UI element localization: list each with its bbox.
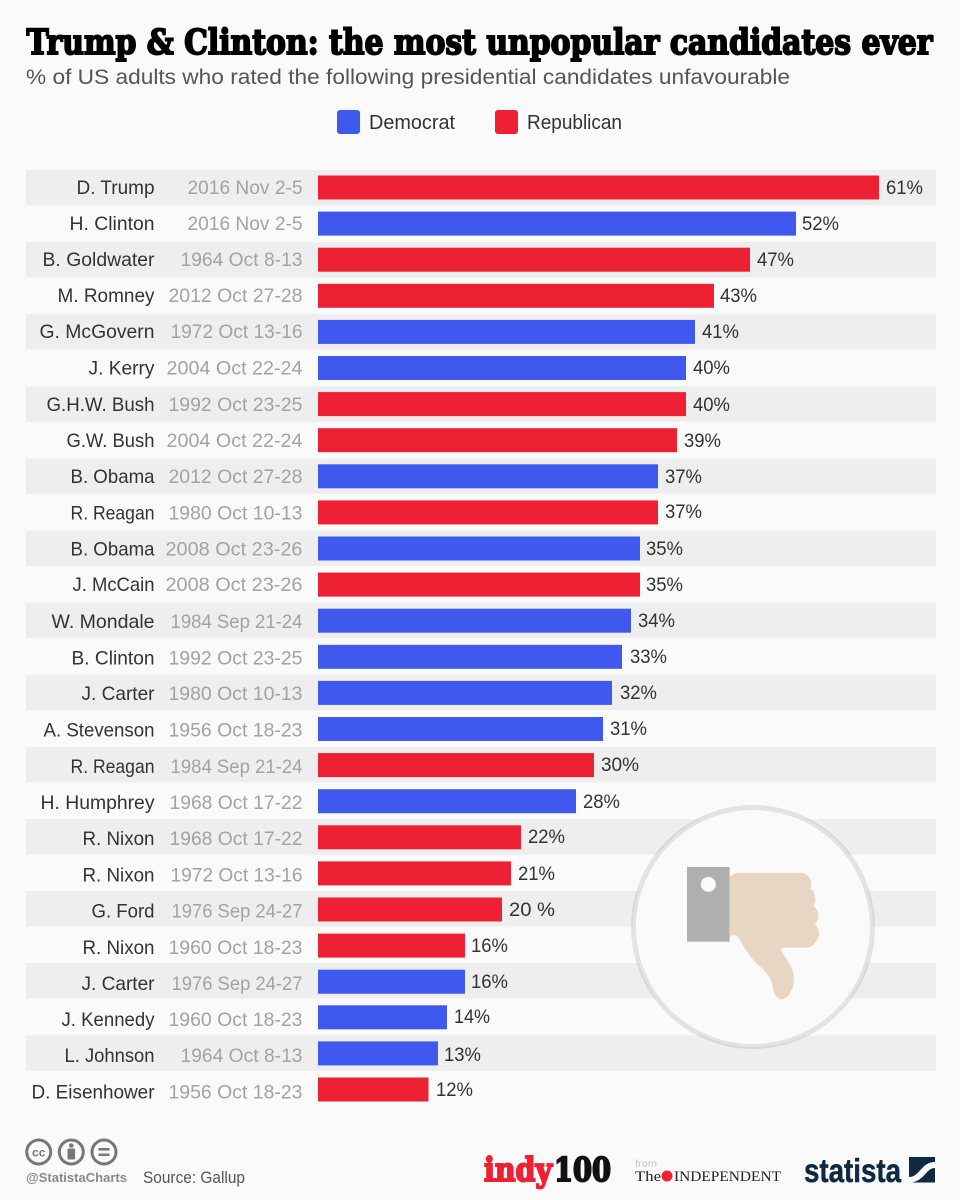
row: B. Clinton 33%: 33% <box>630 646 667 668</box>
legend: Democrat <box>369 111 455 134</box>
row: H. Clinton 52%: 2016 Nov 2-5 <box>188 213 303 235</box>
row: M. Romney 43%: 43% <box>720 285 757 307</box>
row: D. Trump 61%: 61% <box>886 177 923 199</box>
row: J. Kerry 40%: J. Kerry <box>88 358 155 380</box>
row: J. Carter 16%: 16% <box>471 971 508 993</box>
row: R. Reagan 30% <box>70 753 639 778</box>
row: B. Goldwater 47% <box>42 248 794 272</box>
row: J. Carter 16%: J. Carter <box>82 973 155 995</box>
row: G.W. Bush 39%: 2004 Oct 22-24 <box>166 430 303 452</box>
statista charts handle: @StatistaCharts <box>26 1171 127 1185</box>
row: R. Nixon 22%: R. Nixon <box>82 828 154 850</box>
row: R. Reagan 37%: R. Reagan <box>70 502 154 524</box>
row: J. Carter 32%: J. Carter <box>82 683 155 705</box>
row: J. Carter 16%: 1976 Sep 24-27 <box>172 973 302 995</box>
row: G. McGovern 41%: G. McGovern <box>40 321 154 343</box>
row: B. Clinton 33%: 1992 Oct 23-25 <box>168 648 303 670</box>
row: G. McGovern 41%: 1972 Oct 13-16 <box>170 321 302 343</box>
row: G.H.W. Bush 40%: G.H.W. Bush <box>46 394 154 416</box>
row: M. Romney 43%: M. Romney <box>58 285 155 307</box>
row: R. Reagan 37%: 37% <box>665 501 702 523</box>
row: G. McGovern 41%: 41% <box>702 321 739 343</box>
row: J. McCain 35%: J. McCain <box>72 574 154 596</box>
row: D. Eisenhower 12%: D. Eisenhower <box>32 1082 155 1104</box>
row: G.W. Bush 39%: G.W. Bush <box>66 430 154 452</box>
row stripes <box>26 170 936 1071</box>
row: B. Clinton 33%: B. Clinton <box>72 648 154 670</box>
row: J. Carter 32%: 32% <box>620 682 657 704</box>
row: B. Clinton 33% <box>72 645 667 670</box>
row: L. Johnson 13% <box>64 1041 481 1067</box>
row: G. Ford 20% <box>92 898 555 922</box>
row: J. Carter 32%: 1980 Oct 10-13 <box>168 683 302 705</box>
logo: indy100: indy <box>484 1150 553 1189</box>
row: J. McCain 35% <box>72 573 683 597</box>
row: G.W. Bush 39% <box>66 428 721 452</box>
row: R. Nixon 21%: 1972 Oct 13-16 <box>170 864 302 886</box>
row: R. Nixon 16%: 16% <box>471 935 508 957</box>
row: G. Ford 20%: 1976 Sep 24-27 <box>172 900 302 922</box>
row: R. Nixon 16%: R. Nixon <box>82 937 154 959</box>
licence icons <box>27 1140 116 1164</box>
row: W. Mondale 34%: W. Mondale <box>52 611 154 633</box>
row: D. Eisenhower 12%: 1956 Oct 18-23 <box>168 1082 302 1104</box>
row: B. Obama 35%: B. Obama <box>70 538 155 560</box>
row: B. Obama 37%: B. Obama <box>70 466 155 488</box>
legend: Republican <box>527 111 622 134</box>
row: J. Kerry 40%: 40% <box>693 357 730 379</box>
row: W. Mondale 34% <box>52 609 675 633</box>
row: H. Clinton 52% <box>70 212 839 236</box>
row: L. Johnson 13%: L. Johnson <box>64 1045 154 1067</box>
row: J. Kennedy 14%: 14% <box>454 1006 490 1028</box>
row: R. Nixon 22% <box>82 825 565 850</box>
row: G.H.W. Bush 40%: 1992 Oct 23-25 <box>168 394 303 416</box>
row: G. Ford 20%: 20 % <box>509 899 555 921</box>
logo: statista: statista <box>804 1152 902 1189</box>
logo: indy100: 100 <box>554 1150 611 1189</box>
row: H. Clinton 52%: H. Clinton <box>70 213 154 235</box>
row: R. Reagan 30%: 30% <box>601 754 639 776</box>
row: B. Obama 35%: 2008 Oct 23-26 <box>166 538 302 560</box>
row: H. Humphrey 28%: 28% <box>583 791 620 813</box>
row: J. Kennedy 14% <box>62 1005 490 1031</box>
row: D. Eisenhower 12% <box>32 1078 473 1104</box>
logo: indy100 <box>484 1150 611 1189</box>
row: J. McCain 35%: 2008 Oct 23-26 <box>166 574 302 596</box>
row: D. Eisenhower 12%: 12% <box>436 1079 473 1101</box>
row: D. Trump 61% <box>76 176 923 200</box>
row: R. Nixon 22%: 1968 Oct 17-22 <box>170 828 302 850</box>
row: H. Clinton 52%: 52% <box>802 213 839 235</box>
row: G.W. Bush 39%: 39% <box>684 430 721 452</box>
row: H. Humphrey 28%: 1968 Oct 17-22 <box>170 792 302 814</box>
logo: from The Independent: from <box>635 1158 657 1170</box>
row: R. Nixon 21%: 21% <box>518 863 555 885</box>
row: J. McCain 35%: 35% <box>646 574 683 596</box>
logo: from The Independent: The <box>635 1169 661 1185</box>
icon: thumbs down badge <box>633 807 873 1047</box>
row: W. Mondale 34%: 34% <box>638 610 675 632</box>
row: B. Obama 37% <box>70 464 702 488</box>
row: B. Obama 37%: 37% <box>665 466 702 488</box>
row: R. Nixon 16% <box>82 934 508 959</box>
row: J. Kennedy 14%: J. Kennedy <box>62 1009 155 1031</box>
row: B. Obama 37%: 2012 Oct 27-28 <box>168 466 302 488</box>
row: J. Kennedy 14%: 1960 Oct 18-23 <box>168 1009 302 1031</box>
row: J. Kerry 40%: 2004 Oct 22-24 <box>166 358 303 380</box>
row: M. Romney 43% <box>58 284 757 308</box>
row: J. Carter 32% <box>82 681 657 705</box>
row: W. Mondale 34%: 1984 Sep 21-24 <box>170 611 303 633</box>
row: R. Nixon 21% <box>82 861 555 886</box>
row: R. Nixon 16%: 1960 Oct 18-23 <box>168 937 302 959</box>
row: G. Ford 20%: G. Ford <box>92 900 154 922</box>
row: J. Kerry 40% <box>88 356 730 380</box>
source: Source: Gallup <box>143 1169 245 1187</box>
row: B. Obama 35%: 35% <box>646 538 683 560</box>
row: A. Stevenson 31%: A. Stevenson <box>44 720 154 742</box>
row: M. Romney 43%: 2012 Oct 27-28 <box>168 285 302 307</box>
row: H. Humphrey 28%: H. Humphrey <box>40 792 155 814</box>
row: R. Nixon 22%: 22% <box>528 826 565 848</box>
licence icons: cc <box>32 1146 46 1160</box>
row: B. Obama 35% <box>70 536 683 560</box>
row: G.H.W. Bush 40% <box>46 392 730 416</box>
row: B. Goldwater 47%: 1964 Oct 8-13 <box>180 249 302 271</box>
row: A. Stevenson 31%: 31% <box>610 718 647 740</box>
row: R. Reagan 30%: 1984 Sep 21-24 <box>170 756 303 778</box>
row: G. McGovern 41% <box>40 320 739 344</box>
subtitle: % of US adults who rated the following presidential candidates unfavourable <box>26 65 790 89</box>
row: D. Trump 61%: 2016 Nov 2-5 <box>188 177 303 199</box>
logo: from The Independent: INDEPENDENT <box>674 1169 781 1185</box>
row: L. Johnson 13%: 1964 Oct 8-13 <box>180 1045 302 1067</box>
row: A. Stevenson 31% <box>44 717 647 742</box>
row: A. Stevenson 31%: 1956 Oct 18-23 <box>168 720 302 742</box>
row: J. Carter 16% <box>82 970 508 995</box>
row: B. Goldwater 47%: 47% <box>757 249 794 271</box>
row: R. Reagan 37% <box>70 500 702 524</box>
row: R. Reagan 37%: 1980 Oct 10-13 <box>168 502 302 524</box>
row: H. Humphrey 28% <box>40 789 620 814</box>
row: R. Reagan 30%: R. Reagan <box>70 756 154 778</box>
row: G.H.W. Bush 40%: 40% <box>693 394 730 416</box>
row: D. Trump 61%: D. Trump <box>76 177 155 199</box>
row: R. Nixon 21%: R. Nixon <box>82 864 154 886</box>
logo: from The Independent <box>635 1158 781 1185</box>
row: B. Goldwater 47%: B. Goldwater <box>42 249 155 271</box>
row: L. Johnson 13%: 13% <box>444 1044 481 1066</box>
legend <box>337 110 622 134</box>
